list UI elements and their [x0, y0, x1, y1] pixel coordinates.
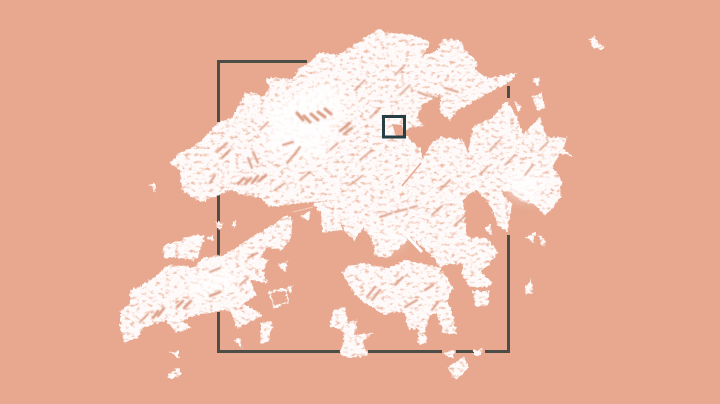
white highlights on central uplands: [190, 80, 545, 300]
bridge: Tsing Ma: [293, 207, 313, 212]
bay inside locator: [392, 124, 404, 136]
land: Tsing Yi: [313, 200, 343, 233]
land: Lantau: [120, 215, 293, 343]
locator square: [384, 116, 404, 137]
land masses: [120, 29, 605, 380]
Shing Mun channel: [402, 163, 421, 186]
locator square with bay inside: [384, 116, 404, 137]
land: New Territories and Kowloon: [170, 29, 573, 287]
frame: dark outline square: [218, 62, 508, 352]
land: Hong Kong Island: [342, 260, 457, 345]
Kai Tak runway: [407, 236, 422, 252]
land: Lamma Island: [330, 307, 375, 358]
small islands: [149, 36, 605, 380]
land: airport platform: [162, 235, 205, 260]
hillshade ridges: [140, 65, 548, 322]
